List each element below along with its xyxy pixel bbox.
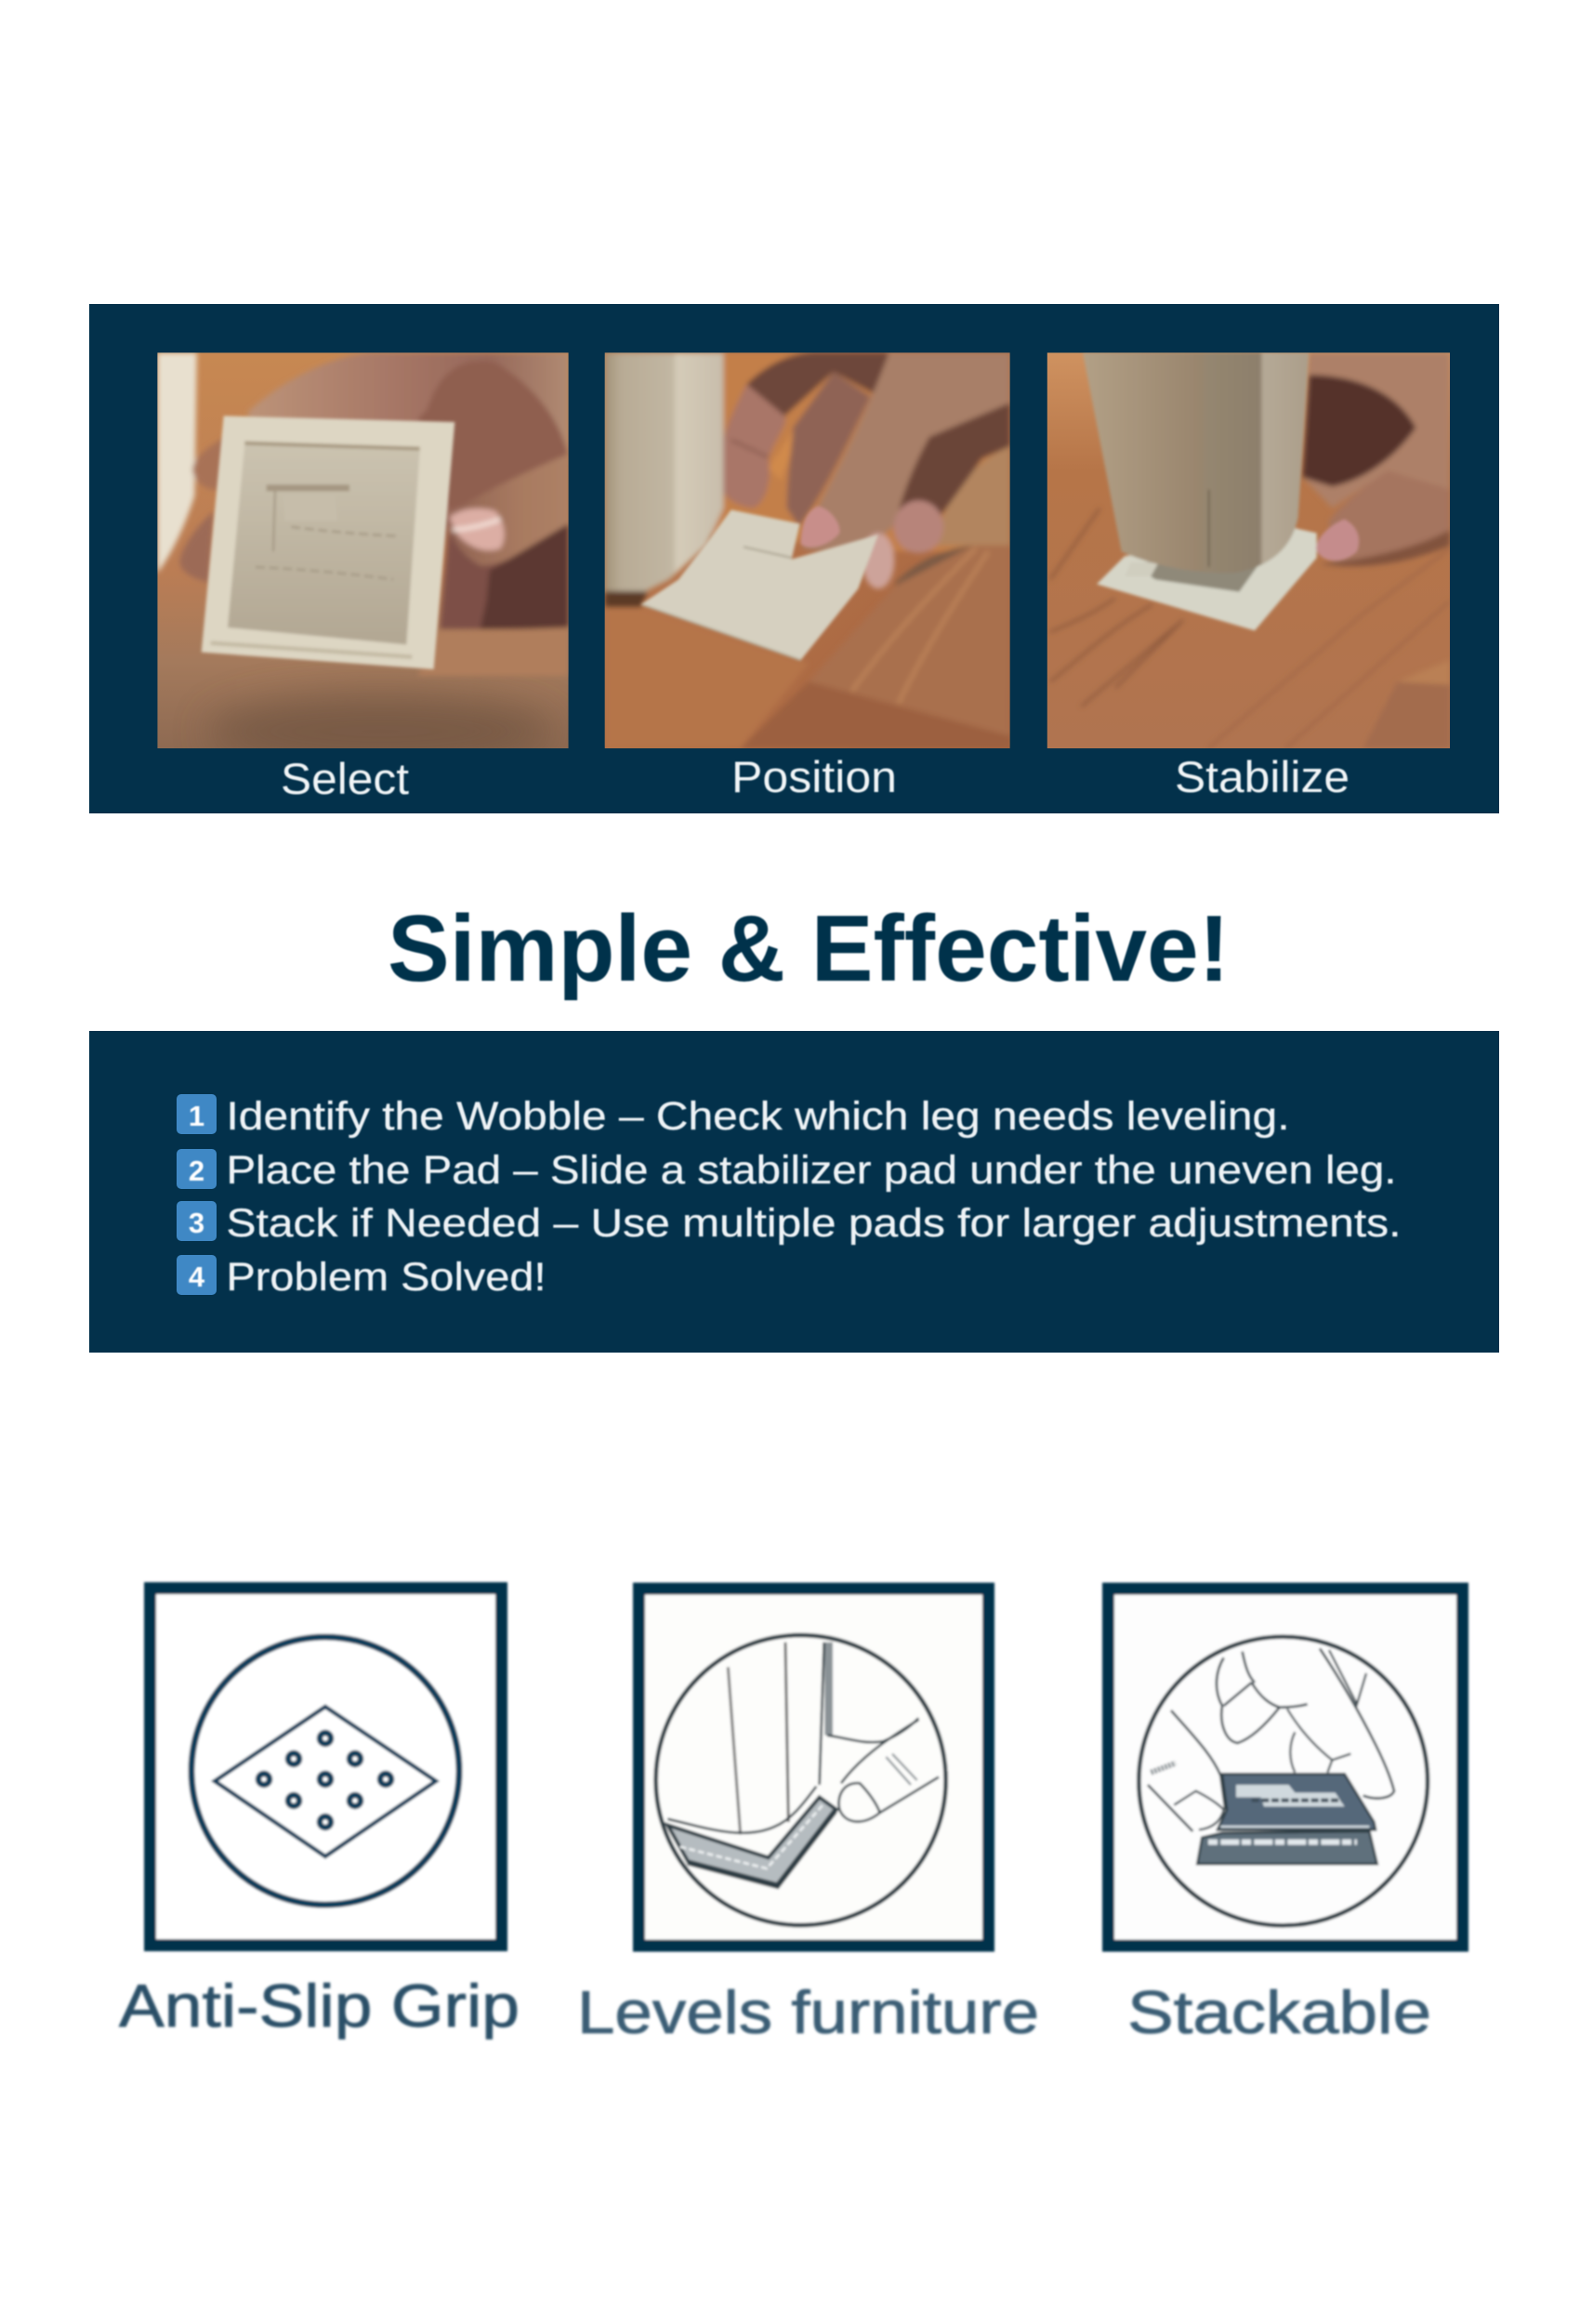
caption: Position: Position: [731, 752, 897, 801]
step 2: 2: [189, 1155, 204, 1187]
label: Levels furniture: Levels furniture: [577, 1978, 1039, 2046]
photo: select, hand holding pad: [157, 352, 569, 769]
step 1: 1: [189, 1100, 204, 1132]
label: Stackable: Stackable: [1127, 1978, 1431, 2046]
panel: how-to steps: [89, 1031, 1499, 1353]
icon: anti-slip grip: [151, 1588, 502, 1945]
step 2: Place the Pad – Slide a stabilizer pad under the uneven leg.: [227, 1148, 1396, 1193]
heading: Simple & Effective!: [388, 897, 1230, 1001]
caption: Select: Select: [281, 754, 409, 803]
panel: three-step photo strip: [89, 304, 1499, 813]
caption: Stabilize: Stabilize: [1175, 752, 1350, 801]
step 3: 3: [189, 1207, 204, 1239]
step 1: Identify the Wobble – Check which leg needs leveling.: [227, 1094, 1290, 1139]
icon: levels furniture: [639, 1589, 989, 1946]
photo: position, fingers sliding pad under leg: [605, 352, 1010, 748]
step 3: Stack if Needed – Use multiple pads for larger adjustments.: [227, 1201, 1402, 1246]
step 4: 4: [189, 1261, 205, 1293]
icon: stackable: [1108, 1589, 1463, 1946]
label: Anti-Slip Grip: Anti-Slip Grip: [119, 1972, 520, 2040]
photo: stabilize, leg resting on pad: [1047, 352, 1450, 748]
step 4: Problem Solved!: [227, 1255, 546, 1300]
